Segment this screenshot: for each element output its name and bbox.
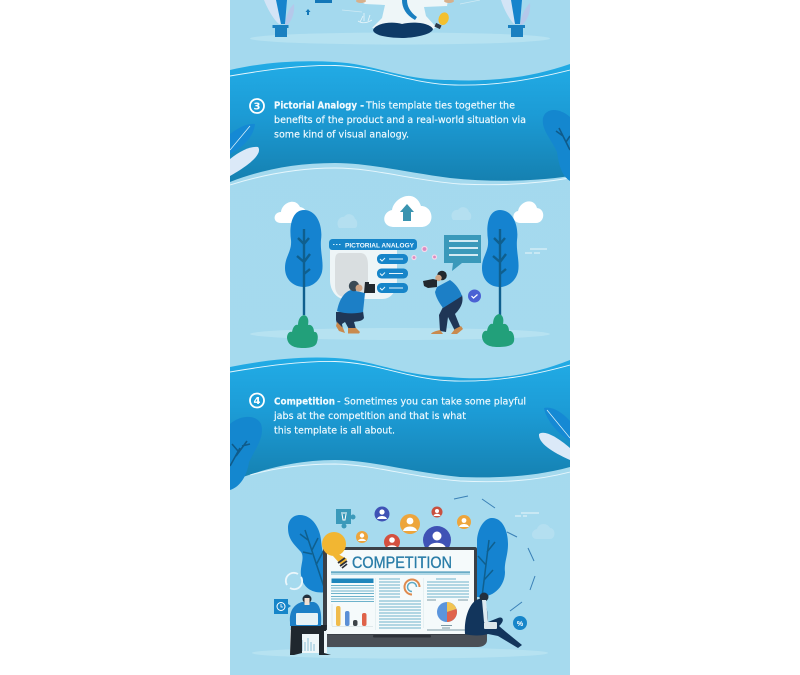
seated man right — [465, 592, 522, 648]
laptop — [323, 547, 487, 647]
rules — [331, 572, 470, 573]
bar chart — [332, 604, 373, 626]
text block: pictorial analogy: This template ties together the — [365, 100, 515, 112]
panel background — [230, 0, 570, 675]
photographer crouching — [336, 281, 375, 334]
text block: competition: jabs at the competition and that is what — [273, 411, 466, 422]
percent badge — [513, 616, 527, 630]
light bulb — [322, 532, 347, 568]
ground — [252, 648, 548, 658]
left column lines — [331, 586, 374, 602]
number badge 4: 4 — [254, 396, 261, 407]
white dashes — [515, 513, 539, 516]
number badge 3: 3 — [254, 102, 261, 112]
pink dots — [412, 246, 436, 260]
puzzle piece — [336, 509, 356, 528]
dashed arc — [454, 496, 535, 611]
middle column lines — [379, 579, 421, 628]
icon: band 4 right leaves — [539, 408, 570, 460]
wave band 3 — [230, 61, 570, 185]
icon: band 3 left leaves — [230, 124, 259, 176]
text block: competition: - — [337, 396, 341, 408]
text block: pictorial analogy: benefits of the product and a real-world situation via — [274, 115, 526, 126]
icon: band 3 right leaf — [543, 110, 570, 181]
text block: pictorial analogy: some kind of visual analogy. — [274, 130, 409, 140]
heading: COMPETITION — [352, 554, 452, 572]
faint cloud — [532, 524, 554, 539]
icon: band 4 left leaf — [230, 417, 262, 490]
illustration: pictorial analogy — [250, 196, 550, 348]
ring chart — [404, 580, 422, 597]
plate — [330, 250, 397, 299]
text block: pictorial analogy: - — [360, 100, 364, 112]
illustration: competition — [252, 496, 554, 658]
check badge — [468, 290, 481, 302]
banner: PICTORIAL ANALOGY — [345, 242, 415, 249]
wave band 4 — [230, 357, 570, 482]
misc lines — [525, 249, 547, 253]
pie chart — [437, 602, 457, 622]
percent badge: % — [517, 621, 524, 628]
photographer standing — [423, 271, 463, 334]
checklist pills — [377, 254, 408, 293]
number badge 4 — [250, 394, 264, 408]
clouds — [275, 196, 543, 228]
refresh ring — [286, 573, 302, 589]
seated man left — [290, 594, 331, 655]
trees — [285, 210, 519, 348]
text block: competition: Sometimes you can take some playful — [344, 396, 526, 408]
right column lines — [427, 579, 469, 597]
text block: competition: this template is all about. — [274, 426, 395, 436]
speech box — [444, 235, 481, 271]
banner — [329, 239, 417, 250]
top illustration: multitasking person — [250, 0, 550, 44]
text block: pictorial analogy: Pictorial Analogy — [274, 100, 357, 112]
ground — [250, 328, 550, 340]
infographic canvas — [230, 0, 570, 675]
avatars — [356, 506, 471, 547]
number badge 3 — [250, 99, 264, 113]
text block: competition: Competition — [274, 396, 335, 408]
trees — [288, 515, 508, 597]
clock badge — [274, 599, 291, 614]
